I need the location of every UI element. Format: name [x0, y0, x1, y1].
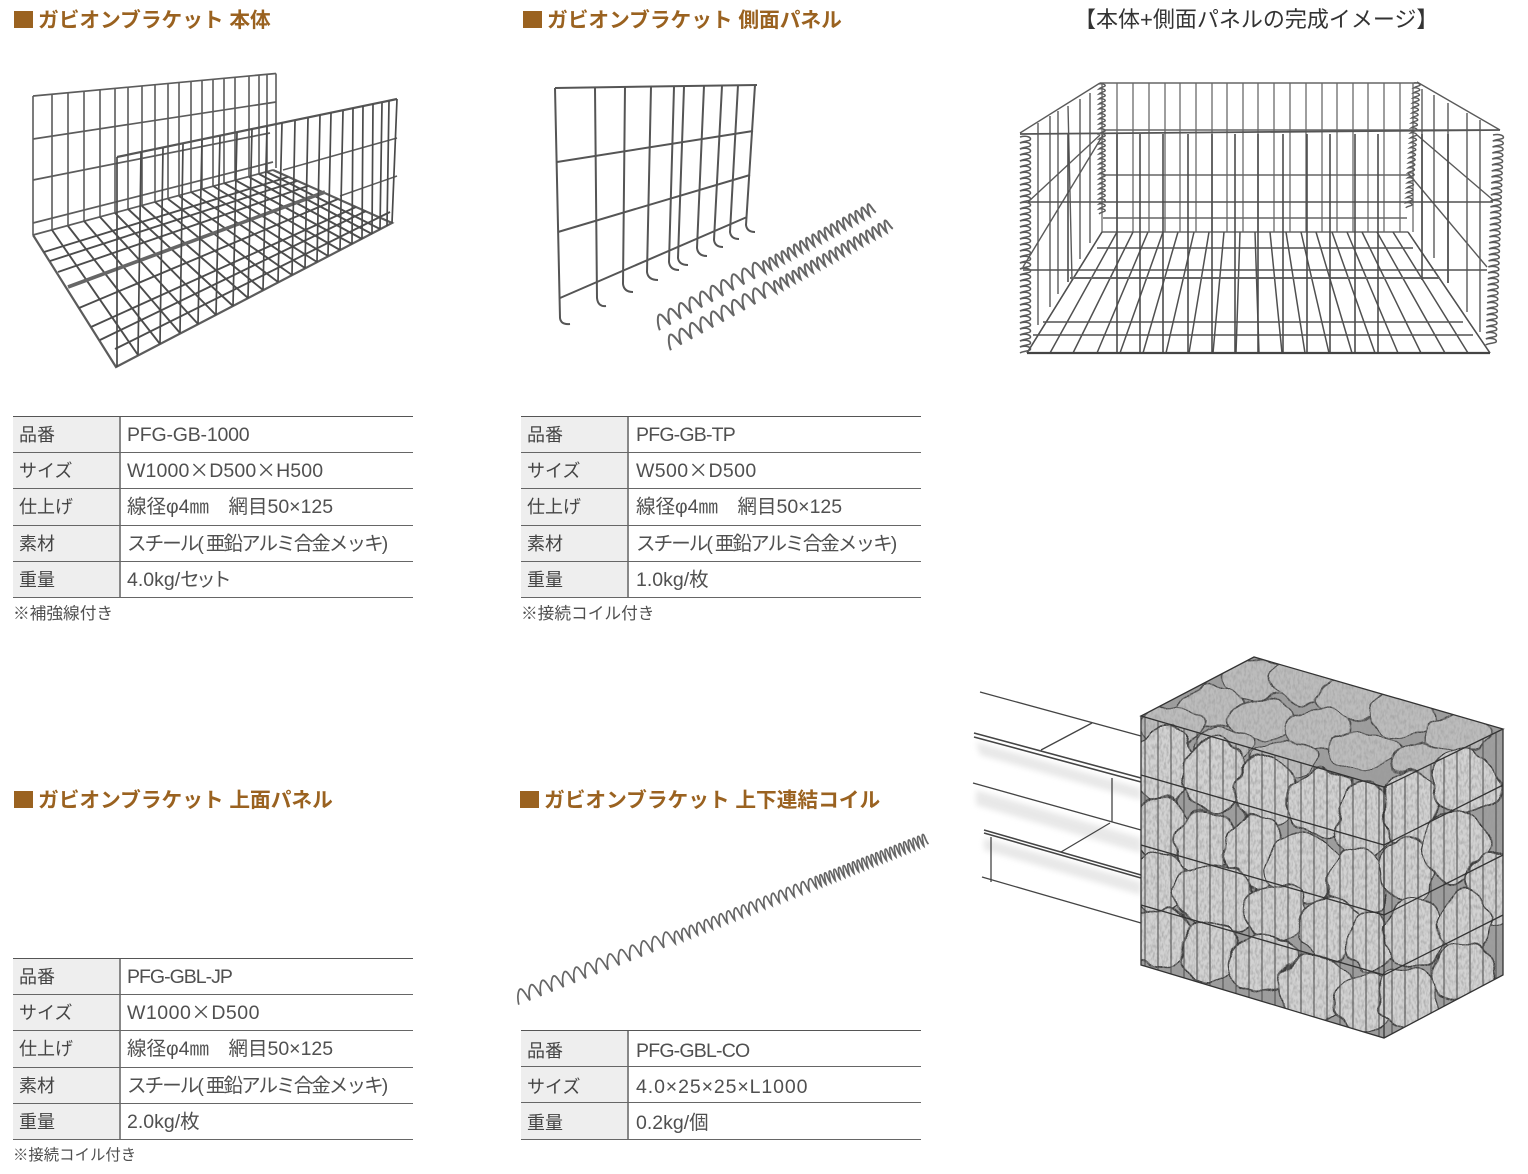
spec table: side panel: 重量 [527, 570, 563, 590]
stones [1128, 657, 1518, 1038]
photo: upper-lower connecting coil [514, 831, 928, 1005]
photo: assembled gabion box with side panels [1020, 82, 1504, 353]
heading: main body: ガビオンブラケット 本体 [38, 9, 271, 32]
spec table: top panel: 2.0kg/枚 [127, 1111, 200, 1133]
spec table: connecting coil: 0.2kg/個 [636, 1112, 709, 1134]
spec table: side panel: 線径φ4㎜ 網目50×125 [636, 496, 842, 518]
spec table: top panel: 重量 [19, 1112, 55, 1132]
spec table: connecting coil: 重量 [527, 1113, 563, 1133]
photo: gabion bracket main body mesh [33, 74, 397, 367]
spec table: side panel: サイズ [527, 461, 580, 481]
photo: side panel mesh [555, 85, 757, 324]
spec table: top panel: PFG-GBL-JP [127, 966, 232, 988]
spec table: top panel [13, 958, 413, 1140]
spec table: main body: スチール(亜鉛アルミ合金メッキ) [127, 533, 386, 555]
note: main body: ※補強線付き [13, 604, 113, 623]
spec table: main body: 仕上げ [19, 497, 73, 517]
wall lines to the left of the gabion [973, 692, 1141, 923]
spec table: main body: PFG-GB-1000 [127, 424, 249, 446]
spec table: side panel [521, 416, 921, 598]
spec table: side panel: 仕上げ [527, 497, 581, 517]
spec table: side panel: PFG-GB-TP [636, 424, 735, 446]
spec table: top panel: W1000×D500 [127, 996, 260, 1025]
spec table: connecting coil: 品番 [527, 1041, 563, 1061]
heading: completed image caption: 【本体+側面パネルの完成イメージ】 [1074, 7, 1438, 32]
spec table: main body [13, 416, 413, 598]
spec table: side panel: 素材 [527, 534, 563, 554]
spec table: connecting coil: 4.0×25×25×L1000 [636, 1076, 808, 1098]
spec table: connecting coil: PFG-GBL-CO [636, 1040, 749, 1062]
spec table: top panel: スチール(亜鉛アルミ合金メッキ) [127, 1075, 386, 1097]
illustration: stone-filled gabion attached to wall [973, 657, 1518, 1038]
spec table: main body: 線径φ4㎜ 網目50×125 [127, 496, 333, 518]
spec table: side panel: 品番 [527, 425, 563, 445]
spec table: connecting coil: サイズ [527, 1077, 580, 1097]
note: side panel: ※接続コイル付き [521, 604, 654, 623]
heading: side panel: ガビオンブラケット 側面パネル [547, 9, 842, 32]
spec table: main body: 品番 [19, 425, 55, 445]
spec table: main body: サイズ [19, 461, 72, 481]
spec table: top panel: 線径φ4㎜ 網目50×125 [127, 1038, 333, 1060]
spec table: top panel: 品番 [19, 967, 55, 987]
spec table: main body: 素材 [19, 534, 55, 554]
wire cage of gabion [1141, 657, 1503, 1038]
note: top panel: ※接続コイル付き [13, 1147, 136, 1164]
spec table: main body: 4.0kg/セット [127, 569, 228, 591]
spec table: side panel: 1.0kg/枚 [636, 569, 709, 591]
spec table: main body: W1000×D500×H500 [127, 454, 323, 483]
spec table: main body: 重量 [19, 570, 55, 590]
spec table: top panel: 素材 [19, 1076, 55, 1096]
spec table: top panel: サイズ [19, 1003, 72, 1023]
heading: top panel: ガビオンブラケット 上面パネル [38, 789, 333, 812]
spec table: side panel: スチール(亜鉛アルミ合金メッキ) [636, 533, 895, 555]
spec table: side panel: W500×D500 [636, 454, 757, 483]
spec table: top panel: 仕上げ [19, 1039, 73, 1059]
heading: connecting coil: ガビオンブラケット 上下連結コイル [544, 789, 880, 812]
spec table: connecting coil [521, 1030, 921, 1140]
icon: connecting coils (pair) [653, 200, 893, 350]
